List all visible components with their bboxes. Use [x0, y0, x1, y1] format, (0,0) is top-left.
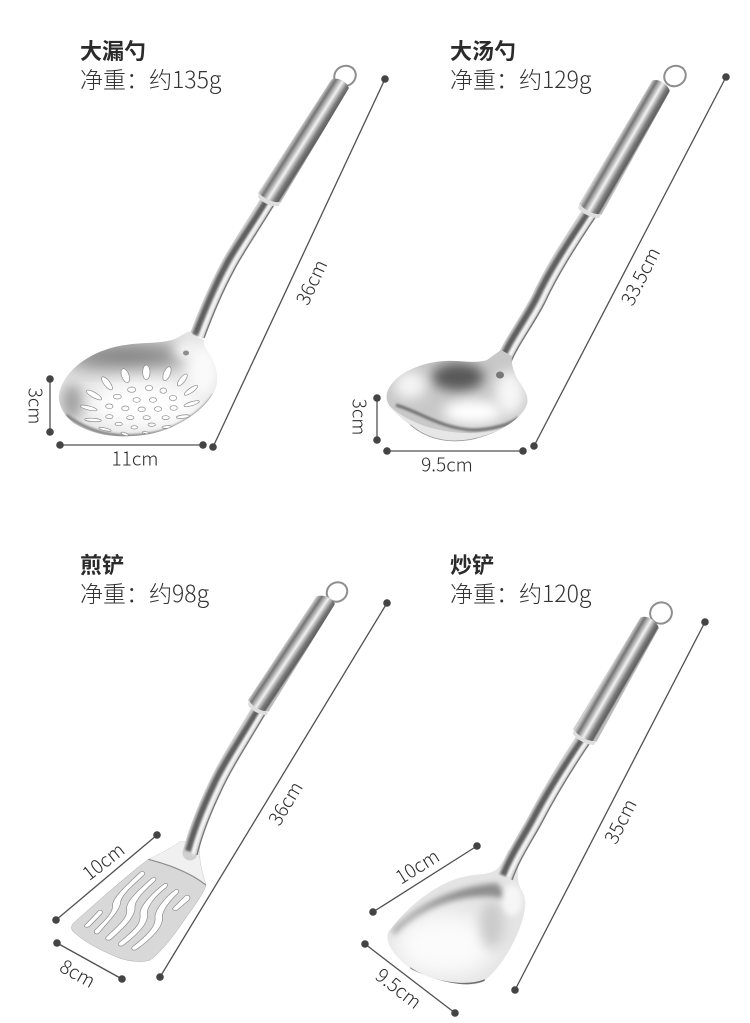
dimension: skimmer length 36cm [209, 75, 389, 451]
title: 大汤勺 [450, 34, 592, 95]
title: 炒铲: 炒铲 [450, 548, 494, 580]
utensil: wok spatula [387, 598, 676, 984]
holes [80, 365, 200, 437]
dimension: wok spatula 10cm [369, 842, 481, 916]
dimension: turner 8cm [53, 939, 126, 994]
dimension: skimmer width 11cm [56, 441, 207, 472]
dimension: turner length 36cm [156, 599, 391, 981]
title: 大汤勺: 净重：约129g [450, 61, 592, 95]
dimension: skimmer length 36cm: 36cm [289, 255, 333, 309]
dimension: ladle length 33.5cm: 33.5cm [614, 242, 666, 310]
utensil: skimmer [59, 62, 360, 437]
title: 煎铲: 煎铲 [80, 548, 124, 580]
title: 大漏勺: 大漏勺 [80, 34, 146, 66]
dimension: wok spatula 10cm: 10cm [390, 842, 444, 890]
dimension: ladle depth 3cm: 3cm [346, 399, 374, 435]
dimension: wok spatula 9.5cm: 9.5cm [370, 961, 428, 1015]
dimension: turner 10cm [52, 831, 161, 924]
dimension: turner 10cm: 10cm [76, 836, 130, 886]
title: 煎铲 [80, 548, 210, 609]
title: 大汤勺: 大汤勺 [450, 34, 516, 66]
title: 炒铲 [450, 548, 592, 609]
utensil: soup ladle [386, 62, 690, 445]
dimension: ladle depth 3cm [346, 394, 381, 444]
dimension: skimmer depth 3cm [22, 375, 54, 436]
title: 炒铲: 净重：约120g [450, 575, 592, 609]
dimension: ladle width 9.5cm [383, 447, 527, 478]
dimension: wok spatula 9.5cm [361, 940, 459, 1017]
dimension: wok spatula length 35cm: 35cm [597, 794, 643, 848]
dimension: turner 8cm: 8cm [55, 952, 101, 994]
turner head [71, 842, 206, 962]
utensil: slotted turner [71, 579, 351, 962]
dimension: ladle length 33.5cm [530, 73, 730, 450]
title: 大漏勺: 净重：约135g [80, 61, 222, 95]
title: 煎铲: 净重：约98g [80, 575, 210, 609]
dimension: ladle width 9.5cm: 9.5cm [421, 450, 473, 478]
dimension: skimmer width 11cm: 11cm [112, 444, 158, 472]
dimension: wok spatula length 35cm [511, 618, 709, 994]
dimension: turner length 36cm: 36cm [261, 776, 309, 830]
dimension: skimmer depth 3cm: 3cm [22, 388, 50, 424]
title: 大漏勺 [80, 34, 222, 95]
